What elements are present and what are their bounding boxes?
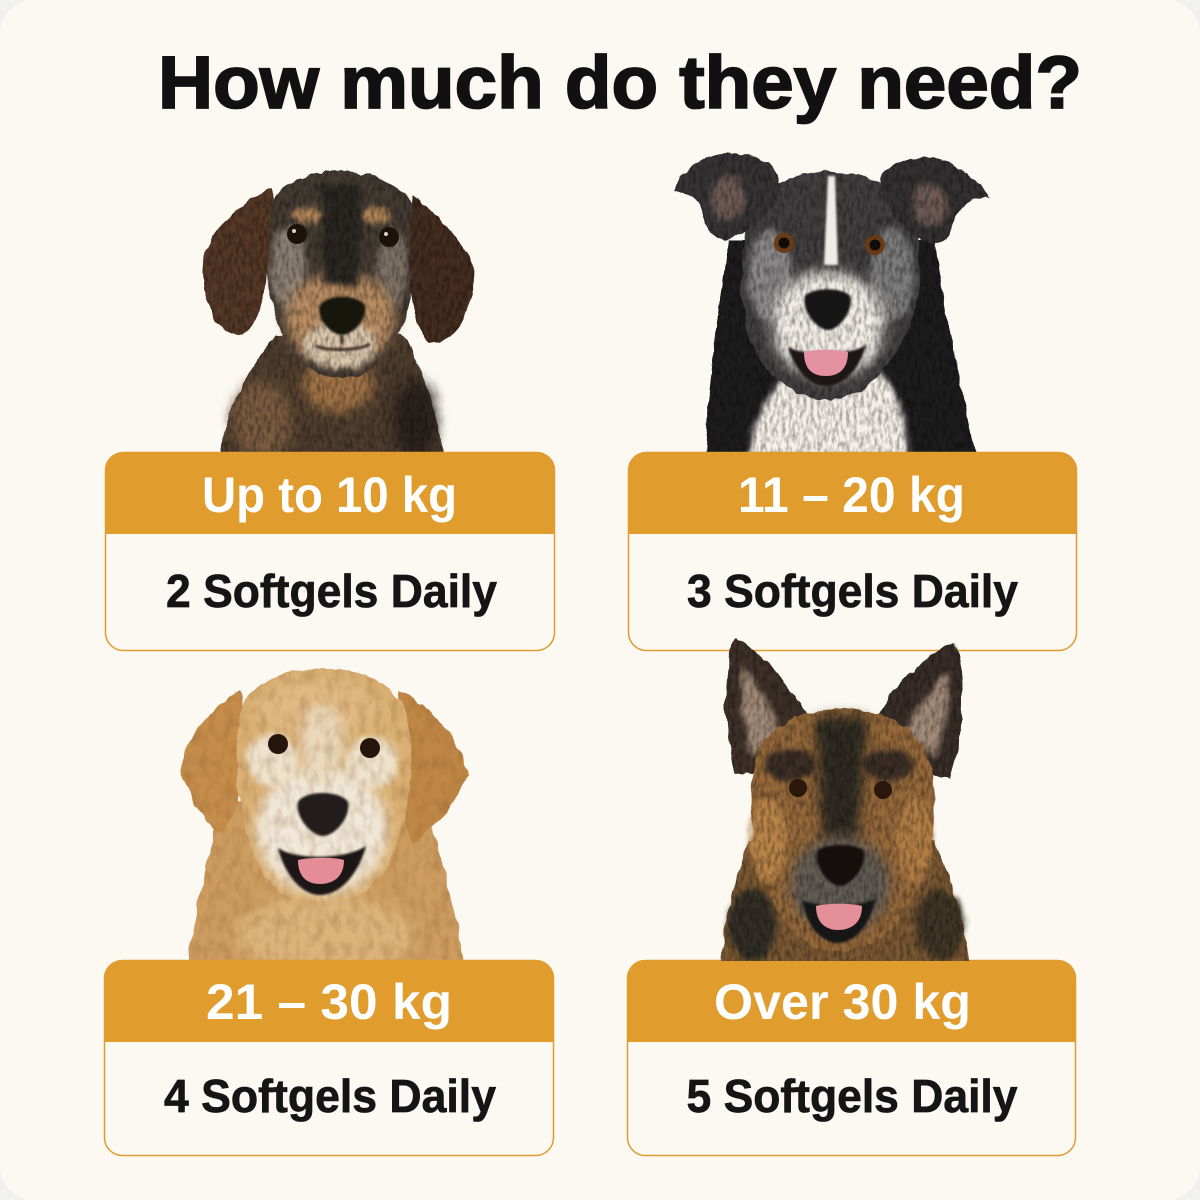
mouth and tongue (788, 345, 866, 386)
nose and mouth (319, 297, 365, 335)
weight label: 11 – 20 kg (738, 467, 965, 523)
weight label: Over 30 kg (714, 974, 971, 1030)
card header (105, 452, 555, 534)
nose (817, 845, 864, 886)
card: 21 to 30 kg (104, 960, 554, 1156)
card: up to 10 kg (105, 452, 555, 650)
eyes (268, 734, 288, 754)
weight label: Up to 10 kg (202, 467, 457, 523)
card header (627, 960, 1076, 1042)
card outline (628, 960, 1076, 1156)
weight label: 21 – 30 kg (206, 974, 452, 1030)
card header (628, 452, 1077, 534)
card outline (628, 452, 1076, 650)
eyes (789, 779, 807, 797)
card: over 30 kg (627, 960, 1076, 1156)
eyes (287, 224, 307, 244)
title: How much do they need? (158, 41, 1082, 124)
mouth and tongue (802, 898, 876, 943)
ears (202, 188, 272, 336)
card: 11 to 20 kg (628, 452, 1077, 650)
nose (804, 289, 851, 330)
nose (298, 793, 348, 836)
dosage: 4 Softgels Daily (164, 1070, 496, 1122)
card outline (104, 960, 554, 1156)
dog: border collie (673, 153, 990, 460)
dosage: 2 Softgels Daily (166, 565, 497, 617)
blaze (824, 176, 838, 265)
card header (104, 960, 554, 1042)
mouth and tongue (278, 846, 366, 895)
eyes (774, 233, 794, 253)
dosage: 5 Softgels Daily (686, 1070, 1018, 1122)
dog: golden retriever (180, 668, 468, 975)
dog: dachshund (202, 172, 474, 460)
dosage: 3 Softgels Daily (687, 565, 1018, 617)
card outline (106, 452, 554, 650)
dog: german shepherd (720, 637, 970, 970)
